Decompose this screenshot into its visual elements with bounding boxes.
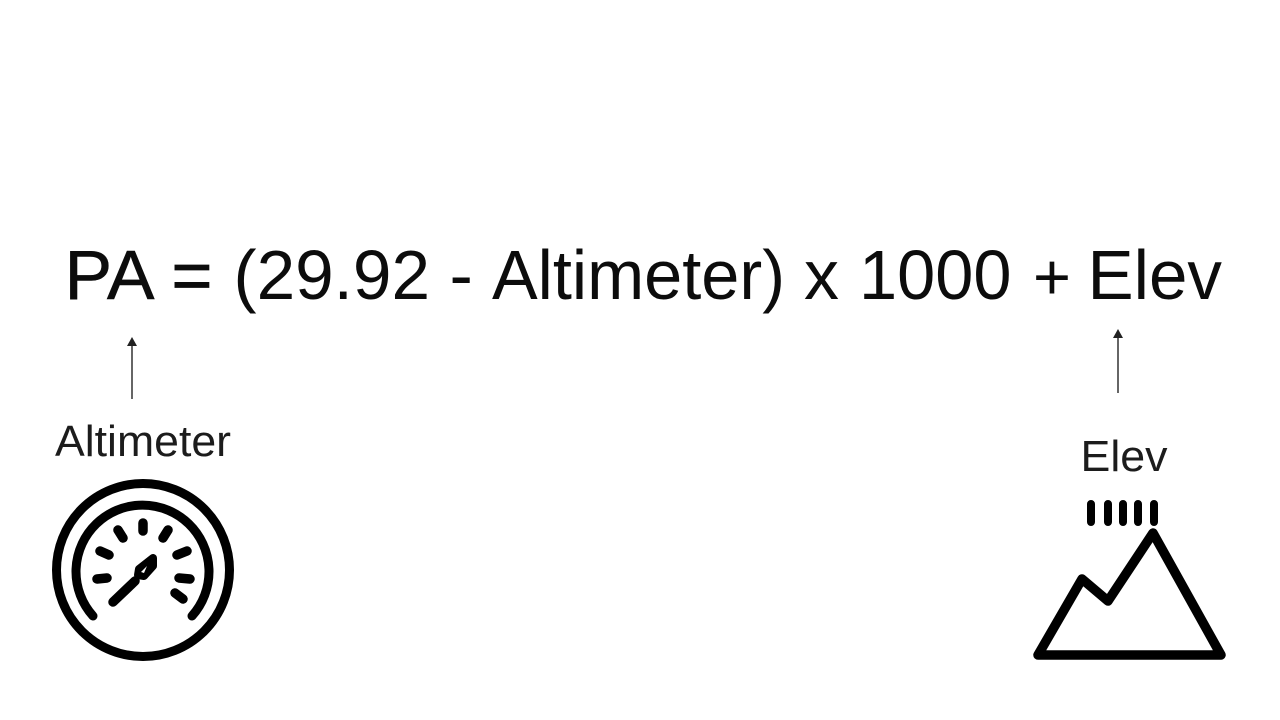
formula heading: x — [804, 236, 839, 314]
label: Altimeter: Altimeter — [55, 417, 231, 466]
formula heading: Altimeter) — [492, 236, 785, 314]
formula heading: + — [1033, 240, 1071, 313]
formula heading: - — [450, 236, 473, 314]
icon: mountain with elevation marks — [1038, 504, 1221, 655]
formula heading — [64, 236, 1222, 314]
arrow: elevation up to Elev — [1113, 329, 1123, 393]
icon: altimeter gauge — [56, 484, 230, 656]
formula heading: = — [172, 236, 212, 314]
label: Elev: Elev — [1080, 432, 1168, 481]
formula heading: Elev — [1088, 236, 1222, 314]
formula heading: (29.92 — [234, 236, 430, 314]
formula heading: 1000 — [859, 236, 1012, 314]
formula heading: PA — [64, 236, 155, 314]
arrow: altimeter up to PA — [127, 337, 137, 399]
